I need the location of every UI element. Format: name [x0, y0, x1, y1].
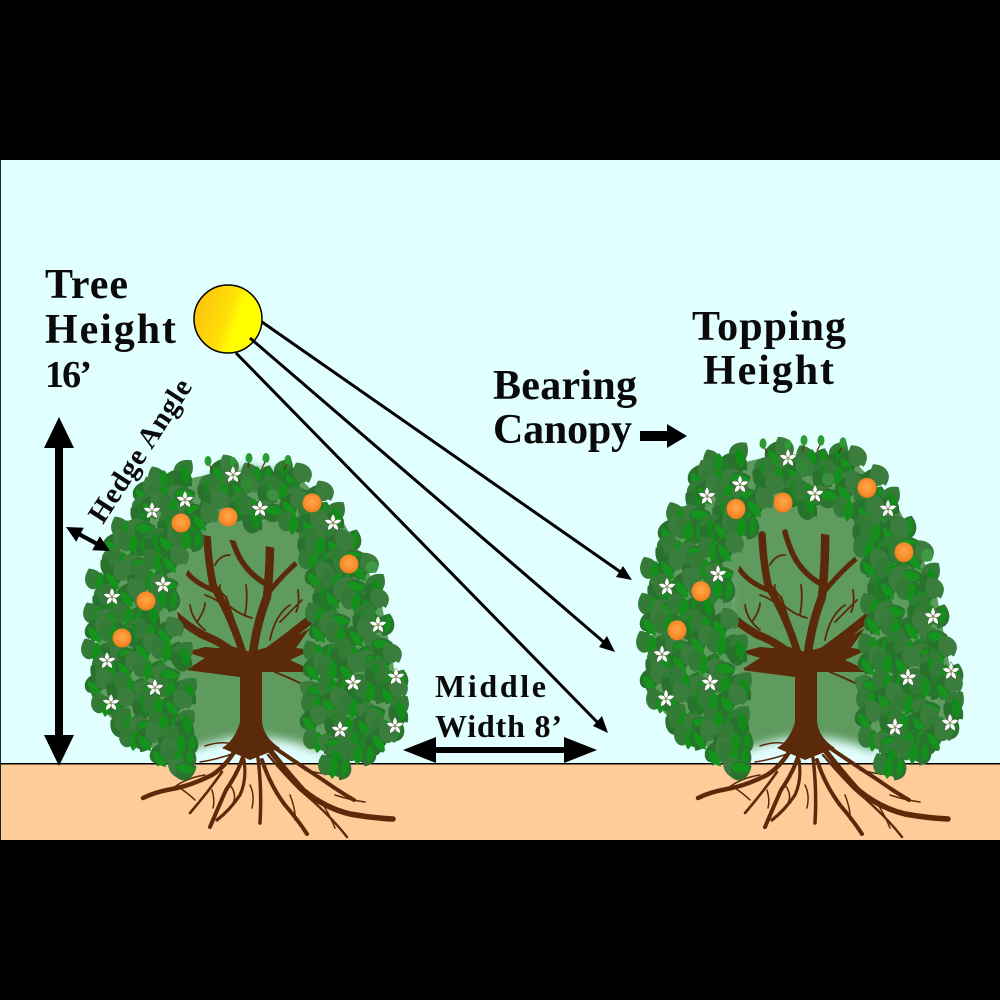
left tree trunk and branches [150, 468, 325, 760]
label: tree height: Tree [45, 262, 128, 308]
sunlight arrows [236, 322, 632, 733]
middle width arrow [403, 737, 597, 763]
right tree trunk and branches [705, 468, 880, 760]
tree height arrow [44, 417, 74, 766]
right tree canopy [632, 432, 970, 784]
label: topping height: Height [703, 348, 834, 394]
label: tree height [45, 262, 176, 396]
right tree roots [698, 742, 948, 837]
bearing canopy arrow [640, 424, 687, 448]
label: middle width: Middle [435, 668, 546, 704]
label: middle width: Width 8’ [435, 708, 562, 744]
label: topping height: Topping [692, 304, 846, 350]
left tree roots [143, 742, 393, 837]
sun [194, 285, 262, 353]
left tree canopy [77, 450, 415, 783]
label: bearing canopy: Canopy [493, 407, 632, 453]
label: tree height: 16’ [45, 354, 92, 396]
sky panel [0, 160, 1000, 764]
ground [0, 764, 1000, 840]
label: middle width [435, 668, 562, 744]
label: topping height [692, 304, 846, 394]
label: bearing canopy: Bearing [493, 363, 637, 409]
label: hedge angle: Hedge Angle [82, 373, 199, 529]
hedge angle arrow [66, 527, 110, 551]
label: tree height: Height [45, 307, 176, 353]
label: bearing canopy [493, 363, 637, 453]
